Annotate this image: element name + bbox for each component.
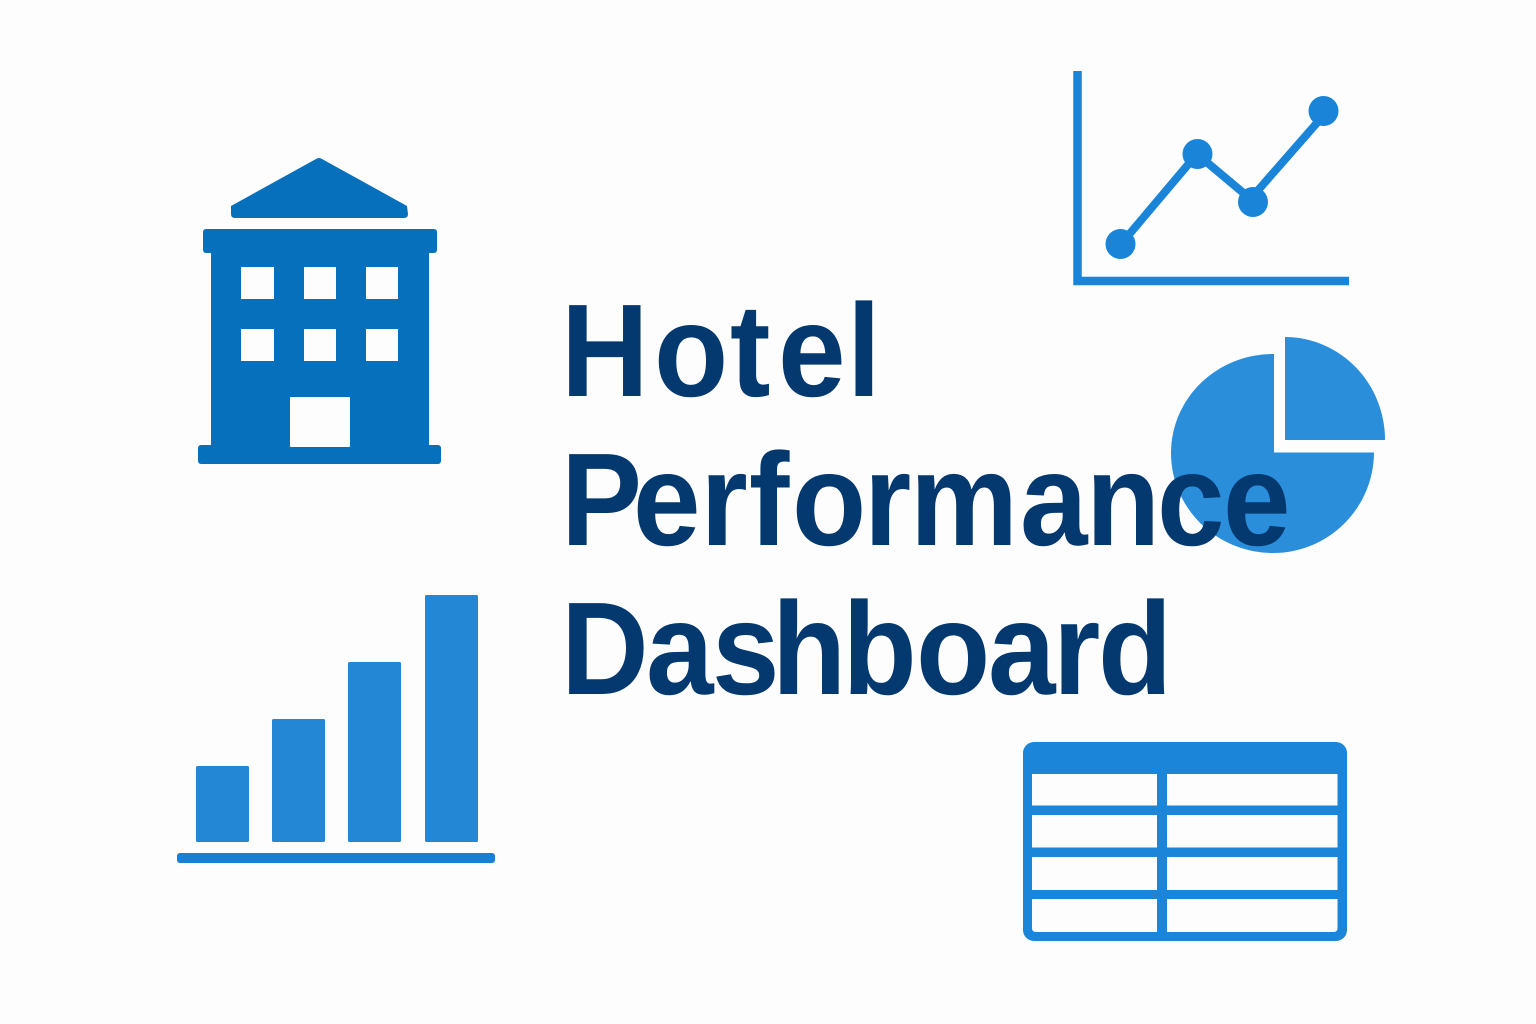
icon: line chart (1078, 71, 1349, 281)
icon: hotel building (198, 158, 441, 464)
icon: pie chart (1171, 337, 1385, 553)
title: Hotel (561, 276, 881, 424)
title: Dashboard (561, 574, 1172, 722)
icon: bar chart (177, 595, 495, 863)
title: Performance (561, 425, 1290, 573)
title (561, 276, 1290, 722)
icon: table (1023, 742, 1347, 941)
